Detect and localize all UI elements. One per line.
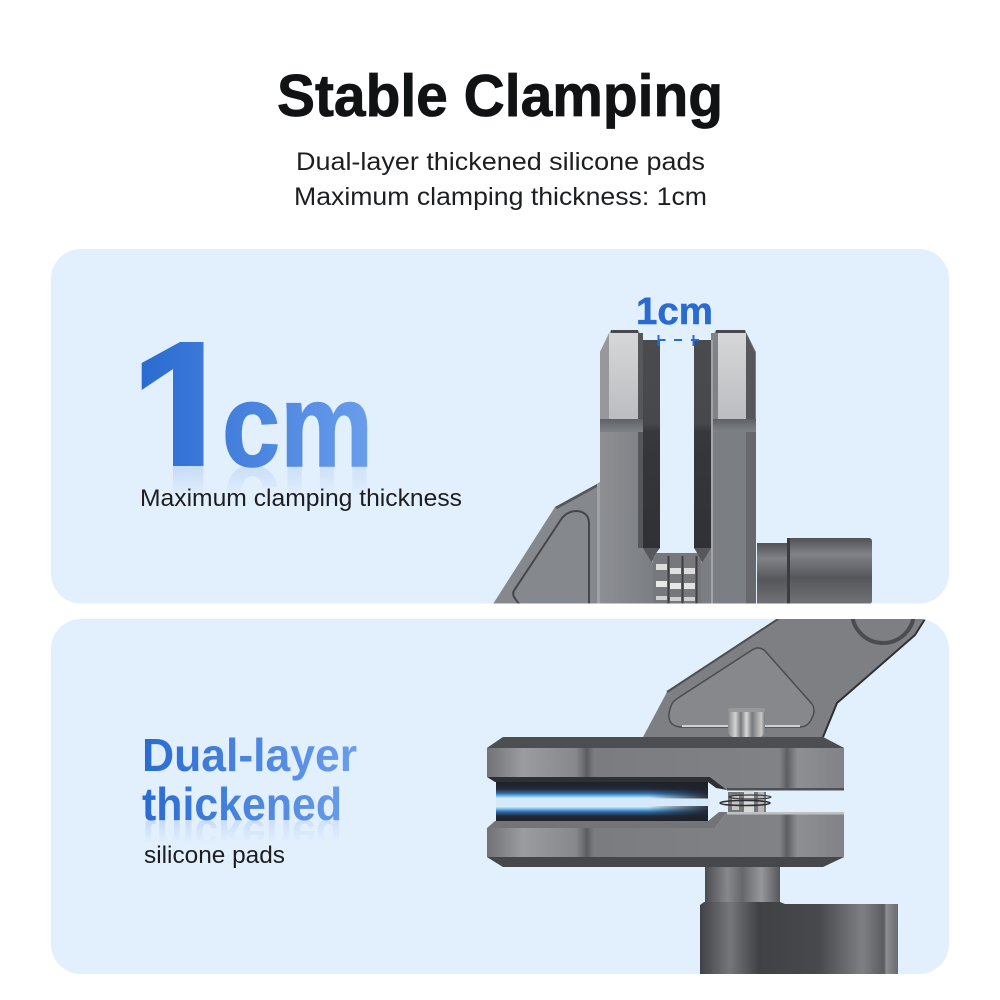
spring between jaws: [720, 791, 771, 813]
panel background: [51, 249, 949, 604]
panel background: [51, 619, 949, 974]
heading: dual-layer thickened: Dual-layer: [142, 729, 357, 781]
big stat: 1cm: 1: [137, 308, 237, 504]
stat caption: Maximum clamping thickness: [140, 485, 462, 512]
spring: [653, 553, 701, 604]
left arm: [597, 330, 653, 604]
product: clamp front view: [493, 330, 872, 604]
subtitle: [294, 148, 707, 211]
base block: [700, 902, 898, 974]
side knob: [757, 538, 872, 604]
stem: [705, 866, 780, 904]
big stat: 1cm: [142, 342, 368, 468]
panel: dual-layer pads: [51, 581, 949, 974]
upper bracket: [643, 619, 926, 738]
big stat: 1cm: cm: [222, 360, 373, 492]
subtitle: Dual-layer thickened silicone pads: [296, 148, 705, 176]
heading: dual-layer thickened: [142, 729, 357, 830]
subtitle: Maximum clamping thickness: 1cm: [294, 183, 707, 211]
stat reflection: [173, 466, 366, 488]
side bracket: [493, 484, 597, 604]
stat reflection: cm: [222, 440, 373, 572]
heading reflection: thickened: [142, 810, 342, 862]
right silicone pad: [694, 340, 711, 563]
upper jaw: [487, 737, 844, 790]
gap dimension marks: [658, 335, 699, 346]
gap label: 1cm: 1cm: [636, 291, 713, 333]
lower jaw: [487, 812, 844, 867]
title: Stable Clamping: [277, 63, 723, 129]
left silicone pad: [638, 333, 660, 563]
panel: maximum thickness: [51, 249, 949, 624]
product: clamp side view: [487, 581, 925, 974]
silicone pads with glow: [496, 782, 710, 822]
heading: dual-layer thickened: thickened: [142, 778, 342, 830]
top pin: [728, 708, 765, 738]
heading caption: silicone pads: [144, 842, 285, 869]
right arm: [701, 330, 756, 604]
stat reflection: 1: [137, 428, 237, 624]
